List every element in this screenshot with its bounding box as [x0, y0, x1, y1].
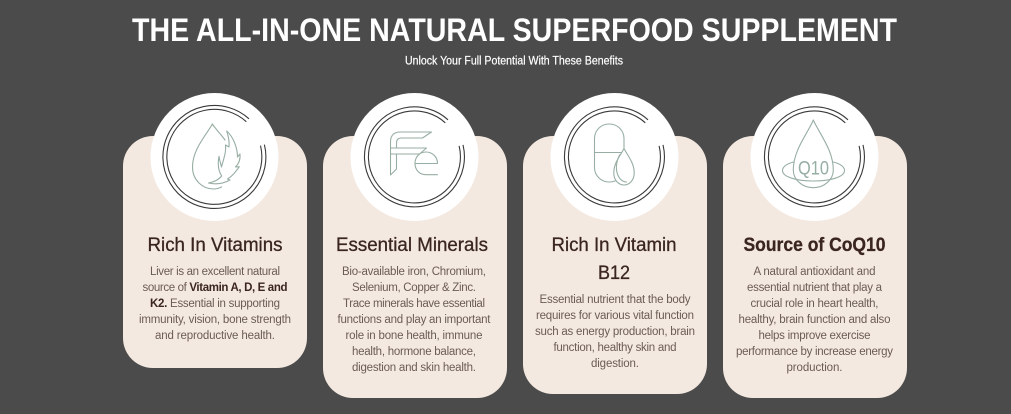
- body text: K2. Essential in supporting: [150, 298, 280, 310]
- subtitle: Unlock Your Full Potential With These Benefits: [405, 56, 623, 68]
- body text: digestion.: [591, 358, 639, 370]
- body text: Bio-available iron, Chromium,: [342, 266, 486, 278]
- body text: essential nutrient that play a: [747, 282, 883, 294]
- heading: Rich In Vitamin: [552, 234, 676, 256]
- body text: requires for various vital function: [536, 310, 694, 322]
- panel: essential minerals: [323, 93, 507, 398]
- panel: rich in vitamins: [123, 93, 307, 368]
- body text: source of Vitamin A, D, E and: [142, 282, 288, 294]
- body text: functions and play an important: [338, 314, 491, 326]
- body text: [535, 294, 695, 370]
- body text: and reproductive health.: [155, 330, 275, 342]
- body text: function, healthy skin and: [554, 342, 676, 354]
- body text: Selenium, Copper & Zinc.: [352, 282, 476, 294]
- body text: production.: [786, 362, 842, 374]
- body text: [338, 266, 491, 374]
- heading: Source of CoQ10: [744, 234, 886, 256]
- body text: healthy, brain function and also: [738, 314, 890, 326]
- body text: helps improve exercise: [758, 330, 870, 342]
- panel: source of CoQ10: [723, 93, 907, 398]
- body text: digestion and skin health.: [352, 362, 476, 374]
- body text: [139, 266, 291, 342]
- heading: Essential Minerals: [336, 234, 488, 256]
- heading: Rich In Vitamins: [148, 234, 283, 256]
- panel: rich in vitamin B12: [523, 93, 707, 394]
- title: THE ALL-IN-ONE NATURAL SUPERFOOD SUPPLEMENT: [132, 12, 897, 48]
- body text: [736, 266, 893, 374]
- body text: Liver is an excellent natural: [150, 266, 280, 278]
- body text: performance by increase energy: [736, 346, 893, 358]
- icon: Q10 drop: Q10: [798, 157, 829, 179]
- icon: Fe symbol: [364, 107, 464, 207]
- heading: [552, 234, 676, 284]
- body text: role in bone health, immune: [346, 330, 482, 342]
- body text: Essential nutrient that the body: [540, 294, 691, 306]
- body text: A natural antioxidant and: [754, 266, 876, 278]
- body text: Trace minerals have essential: [343, 298, 485, 310]
- body text: crucial role in heart health,: [750, 298, 878, 310]
- icon: Q10 drop: [764, 107, 864, 207]
- body text: health, hormone balance,: [352, 346, 476, 358]
- heading: B12: [598, 262, 630, 284]
- body text: such as energy production, brain: [535, 326, 695, 338]
- body text: immunity, vision, bone strength: [139, 314, 291, 326]
- icon: capsule and drop: [564, 107, 664, 207]
- icon: drop and feather: [163, 105, 266, 208]
